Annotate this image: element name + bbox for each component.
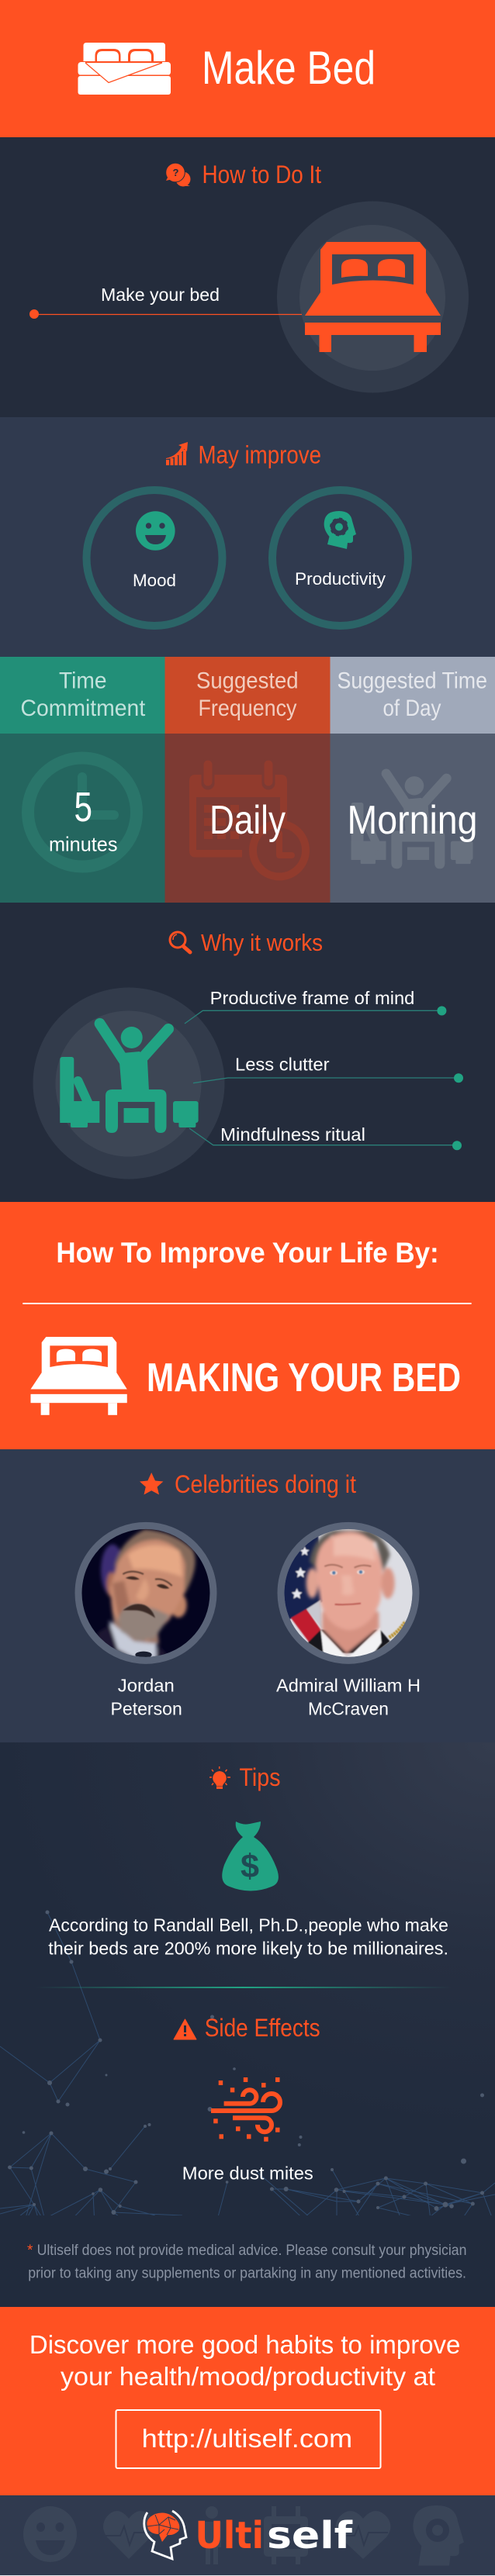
ghost icon: smile (23, 2506, 77, 2562)
value: 5 minutes: 5 (74, 784, 92, 830)
logo head outline (144, 2511, 186, 2559)
item: productivity (272, 490, 408, 626)
panel: tips and side effects (0, 1742, 495, 2308)
link button (116, 2410, 380, 2468)
icon: bed (305, 242, 441, 352)
icon: made bed (78, 43, 171, 95)
ghost icon row (23, 2505, 464, 2566)
icon: rising chart (166, 442, 188, 465)
side effect text: More dust mites (182, 2163, 313, 2184)
icon: faded clock (28, 758, 137, 867)
tip text: According to Randall Bell, Ph.D.,people who make (49, 1915, 448, 1935)
tip text: their beds are 200% more likely to be millionaires. (48, 1938, 448, 1958)
name: Admiral William H McCraven (276, 1676, 421, 1719)
icon: white bed (31, 1337, 127, 1415)
disclaimer: * (27, 2243, 33, 2259)
icon: question chat bubbles (166, 163, 191, 186)
icon: dust wind (211, 2077, 280, 2142)
network background (0, 1911, 495, 2226)
cta text: your health/mood/productivity at (61, 2362, 435, 2391)
panel: may improve (0, 417, 495, 657)
icon: faded calendar (189, 765, 306, 876)
heading: tips (209, 1763, 281, 1791)
label: suggested time of day: of Day (383, 696, 441, 721)
name: Admiral William H McCraven: McCraven (308, 1699, 389, 1719)
name: Admiral William H McCraven: Admiral William H (276, 1676, 421, 1696)
portrait: Jordan Peterson (78, 1525, 213, 1661)
heading: how to do it (166, 161, 321, 188)
ghost icon: person (202, 2506, 221, 2564)
logo (144, 2511, 353, 2559)
tip text (48, 1915, 448, 1958)
heading: celebrities doing it: Celebrities doing it (175, 1470, 356, 1498)
ghost icon: chip (264, 2506, 308, 2564)
panel: call to action (0, 2307, 495, 2495)
callout: mindfulness ritual (189, 1124, 462, 1150)
step text: Make your bed (101, 285, 220, 305)
label: time commitment: Time (59, 668, 107, 693)
logo wordmark: self (267, 2514, 353, 2557)
label: suggested time of day (337, 668, 487, 721)
disclaimer: Ultiself does not provide medical advice. Please consult your physician (37, 2243, 467, 2259)
ghost icon: heart (103, 2511, 154, 2559)
cta text: Discover more good habits to improve (29, 2330, 460, 2359)
value: 5 minutes (49, 784, 118, 856)
link button: http://ultiself.com (142, 2424, 352, 2453)
icon: head with gear (324, 511, 356, 549)
icon: question chat bubbles: ? (172, 167, 178, 178)
label: time commitment (20, 668, 146, 721)
icon: concentric circle backdrop (277, 202, 469, 392)
icon: money bag (222, 1822, 279, 1891)
ghost icon: heart (335, 2511, 391, 2559)
label: suggested frequency: Frequency (199, 696, 296, 721)
panel: celebrities (0, 1449, 495, 1742)
callout: less clutter: Less clutter (235, 1055, 330, 1075)
heading: how to do it: How to Do It (202, 161, 321, 188)
heading: why it works: Why it works (201, 929, 323, 956)
panel: header (0, 0, 495, 137)
panel: footer (0, 2495, 495, 2576)
panel: suggested time of day (331, 657, 495, 903)
heading: tips: Tips (239, 1763, 281, 1791)
icon: money bag: $ (241, 1848, 259, 1885)
icon: magnifier (170, 932, 190, 952)
label: suggested frequency: Suggested (196, 668, 299, 693)
name: Jordan Peterson (110, 1676, 182, 1719)
logo wordmark: Ulti (196, 2514, 264, 2557)
logo brain (147, 2512, 179, 2542)
name: Jordan Peterson: Peterson (110, 1699, 182, 1719)
logo wordmark (196, 2514, 353, 2557)
callout: productive frame of mind: Productive frame of mind (210, 988, 414, 1008)
value: daily: Daily (209, 798, 286, 843)
heading: side effects: Side Effects (205, 2014, 320, 2042)
label: suggested frequency (196, 668, 299, 721)
callout: less clutter (193, 1055, 463, 1083)
item: mood: Mood (133, 571, 176, 590)
item: productivity: Productivity (295, 569, 386, 589)
panel: how to do it (0, 137, 495, 417)
portrait: William McCraven (281, 1525, 417, 1661)
value: morning: Morning (348, 798, 478, 843)
panel: why it works (0, 903, 495, 1202)
disclaimer: prior to taking any supplements or partaking in any mentioned activities. (28, 2265, 466, 2281)
name: Jordan Peterson: Jordan (118, 1676, 175, 1696)
item: mood (87, 490, 222, 626)
step line (29, 309, 302, 319)
icon: warning triangle (174, 2019, 196, 2039)
icon: star (140, 1473, 163, 1495)
icon: faded person rising from bed (351, 774, 473, 868)
callout: productive frame of mind (185, 988, 446, 1024)
label: time commitment: Commitment (20, 696, 146, 721)
panel: how to improve your life banner (0, 1202, 495, 1449)
disclaimer (27, 2243, 467, 2281)
callout: mindfulness ritual: Mindfulness ritual (220, 1124, 365, 1145)
value: 5 minutes: minutes (49, 833, 118, 856)
icon: light bulb (209, 1766, 230, 1789)
panel: time commitment (0, 657, 164, 903)
ghost icon: head with gear (413, 2505, 464, 2566)
banner heading: How To Improve Your Life By: (56, 1237, 439, 1269)
title: Make Bed (202, 42, 376, 94)
icon: person rising from bed (60, 1024, 199, 1133)
icon: smiling face (136, 511, 175, 551)
panel: suggested frequency (164, 657, 331, 903)
heading: may improve: May improve (199, 440, 321, 468)
icon: concentric circle backdrop (33, 988, 225, 1179)
cta text (29, 2330, 460, 2391)
